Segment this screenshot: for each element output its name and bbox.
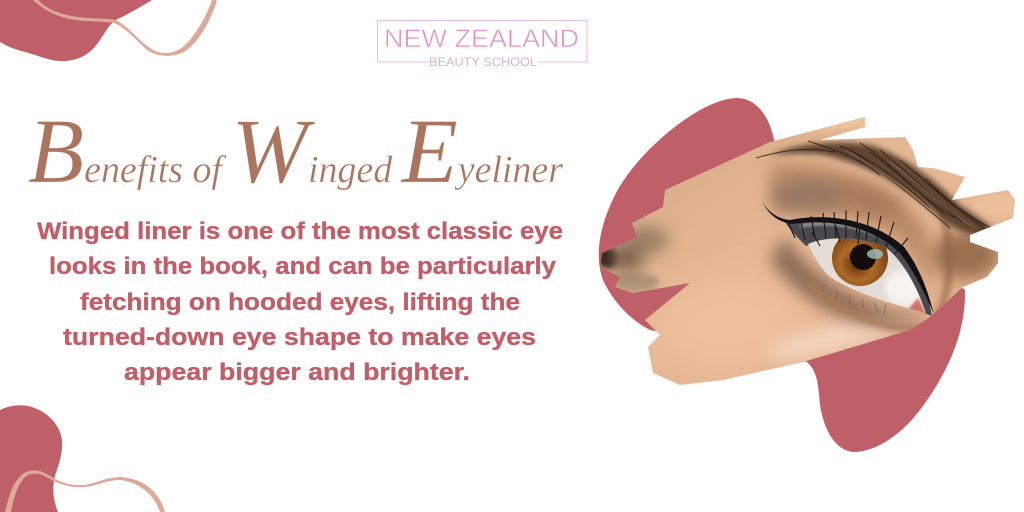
decorative blob: bottom left [0, 405, 165, 512]
logo: New Zealand Beauty School: BEAUTY SCHOOL [429, 55, 537, 69]
lower lashes [822, 284, 886, 314]
decorative line: bottom left [5, 470, 165, 512]
brush-stroke skin with eye [600, 117, 1015, 385]
body paragraph: Winged liner is one of the most classic eye [37, 218, 563, 245]
logo: New Zealand Beauty School: NEW ZEALAND [384, 25, 579, 53]
body paragraph [37, 218, 563, 386]
body paragraph: appear bigger and brighter. [124, 359, 470, 386]
iris [832, 238, 888, 286]
pink blob behind eye [599, 98, 965, 452]
logo: New Zealand Beauty School [378, 20, 587, 69]
winged eyeliner [762, 201, 934, 314]
body paragraph: turned-down eye shape to make eyes [63, 324, 536, 351]
illustration: eye photo on blob [590, 98, 1024, 452]
eyeball [808, 238, 926, 313]
lashes [788, 210, 908, 254]
body paragraph: fetching on hooded eyes, lifting the [80, 289, 520, 316]
title: Benefits of Winged Eyeliner [28, 100, 563, 202]
eyelid and socket shadow [770, 164, 935, 290]
grey lid band with lashes [785, 218, 932, 316]
pupil [850, 244, 876, 270]
body paragraph: looks in the book, and can be particularly [49, 253, 557, 280]
decorative blob: top left [0, 0, 217, 61]
left smudge [598, 248, 618, 268]
decorative line: top left [33, 0, 217, 56]
under-eye shadow [770, 235, 930, 325]
eyebrow [770, 142, 995, 236]
